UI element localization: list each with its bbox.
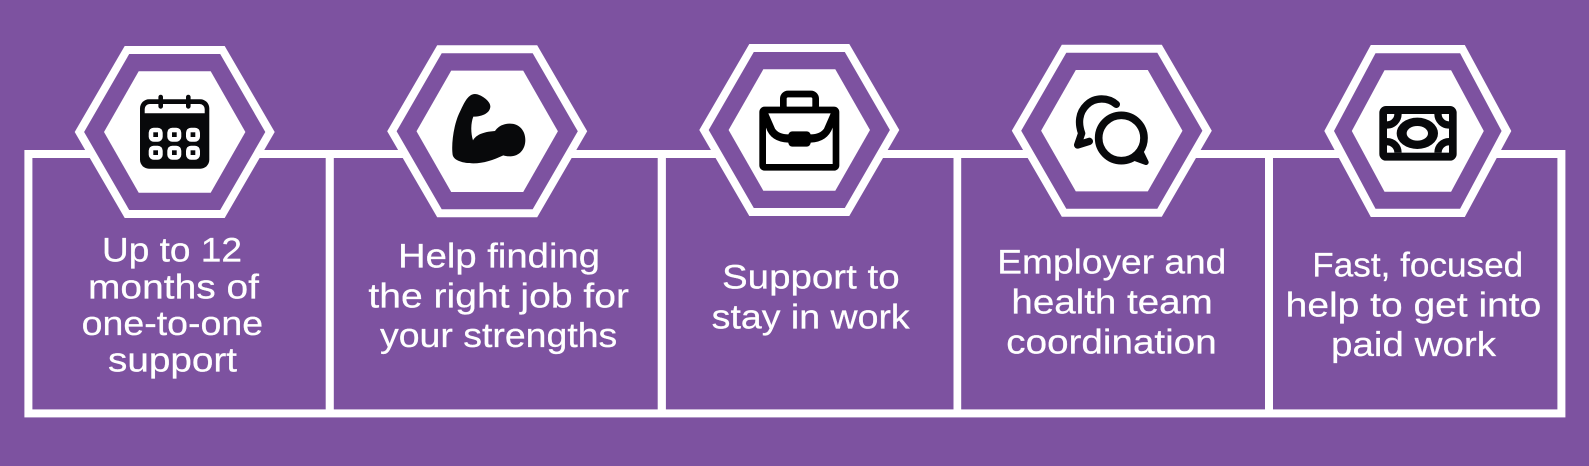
hexagon: briefcase [699,44,899,216]
icon: banknote [1379,106,1457,161]
panel: one-to-one support [32,158,326,409]
icon: flexed arm [452,94,525,163]
panel: stay in work [666,158,954,409]
hexagon: banknote [1324,45,1511,217]
text: up to 12 months [82,231,263,380]
hexagon: chat [1012,45,1212,217]
text: employer and health team coordination: health team [1011,284,1213,322]
panel: employer and health team [961,158,1265,409]
text: employer and health team coordination [997,244,1226,361]
hexagon: arm [387,45,587,217]
text: employer and health team coordination: Employer and [997,244,1226,282]
icon: calendar [140,95,209,169]
panel: paid work [1273,158,1557,409]
icon: speech bubbles [1078,99,1146,162]
text: up to 12 months: months of [88,268,260,306]
text: employer and health team coordination: coordination [1006,323,1217,361]
text: help finding the right job: the right job for [368,277,629,315]
hexagon: calendar [75,46,275,218]
text: support to stay in work: Support to [722,258,900,296]
text: up to 12 months: support [108,342,238,380]
text: up to 12 months: Up to 12 [102,231,242,269]
icon: briefcase [759,94,839,171]
text: help finding the right job [368,238,629,355]
text: fast focused help: paid work [1331,326,1497,364]
text: up to 12 months: one-to-one [82,305,263,343]
white frame [24,150,1565,417]
text: fast focused help: Fast, focused [1312,247,1523,285]
text: help finding the right job: Help finding [398,238,600,276]
text: fast focused help: help to get into [1286,287,1541,325]
text: support to stay in work [712,258,911,336]
panel: right job [334,158,658,409]
text: fast focused help [1286,247,1541,364]
text: help finding the right job: your strengths [380,317,617,355]
text: support to stay in work: stay in work [712,298,911,336]
